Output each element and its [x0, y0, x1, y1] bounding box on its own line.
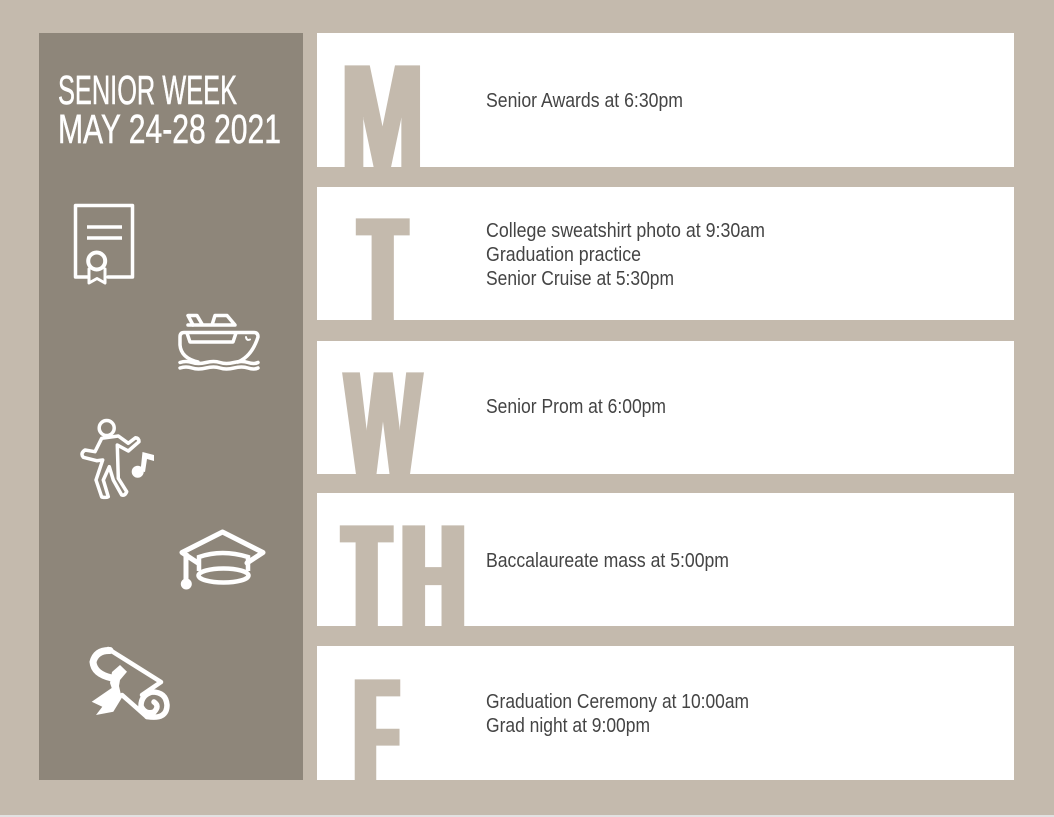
text: Monday events: Senior Awards at 6:30pm [486, 89, 683, 112]
text: Friday events: Grad night at 9:00pm [486, 714, 650, 737]
day letter: W: W [345, 340, 421, 509]
text: Tuesday events: Graduation practice [486, 243, 641, 266]
day letter: TH: T [345, 494, 388, 663]
day letter: F: F [356, 647, 397, 816]
icon: dancer with music note [82, 420, 154, 497]
icon: certificate [76, 206, 132, 283]
panel: Tuesday [317, 187, 1014, 356]
text: Friday events: Graduation Ceremony at 10:00am [486, 690, 749, 713]
panel: Monday [317, 33, 1014, 203]
text: Tuesday events: College sweatshirt photo at 9:30am [486, 219, 765, 242]
text: Tuesday events [486, 219, 765, 290]
text: Tuesday events: Senior Cruise at 5:30pm [486, 267, 674, 290]
icon: diploma scroll [92, 649, 167, 717]
text: Thursday events: Baccalaureate mass at 5:00pm [486, 549, 729, 572]
text: Friday events [486, 690, 749, 737]
panel: left sidebar [39, 33, 303, 780]
icon: cruise ship [180, 316, 258, 369]
day letter: M: M [341, 34, 424, 203]
icon: graduation cap [181, 532, 263, 590]
day letter: T: T [361, 187, 404, 356]
title: SENIOR WEEK [58, 67, 237, 113]
panel: Friday [317, 646, 1014, 816]
panel: Thursday [317, 493, 1014, 663]
panel: Wednesday [317, 340, 1014, 509]
title [58, 67, 281, 152]
day letter: TH [345, 494, 465, 663]
text: Wednesday events: Senior Prom at 6:00pm [486, 395, 666, 418]
title: MAY 24-28 2021 [58, 106, 281, 152]
day letter: TH: H [402, 494, 465, 663]
